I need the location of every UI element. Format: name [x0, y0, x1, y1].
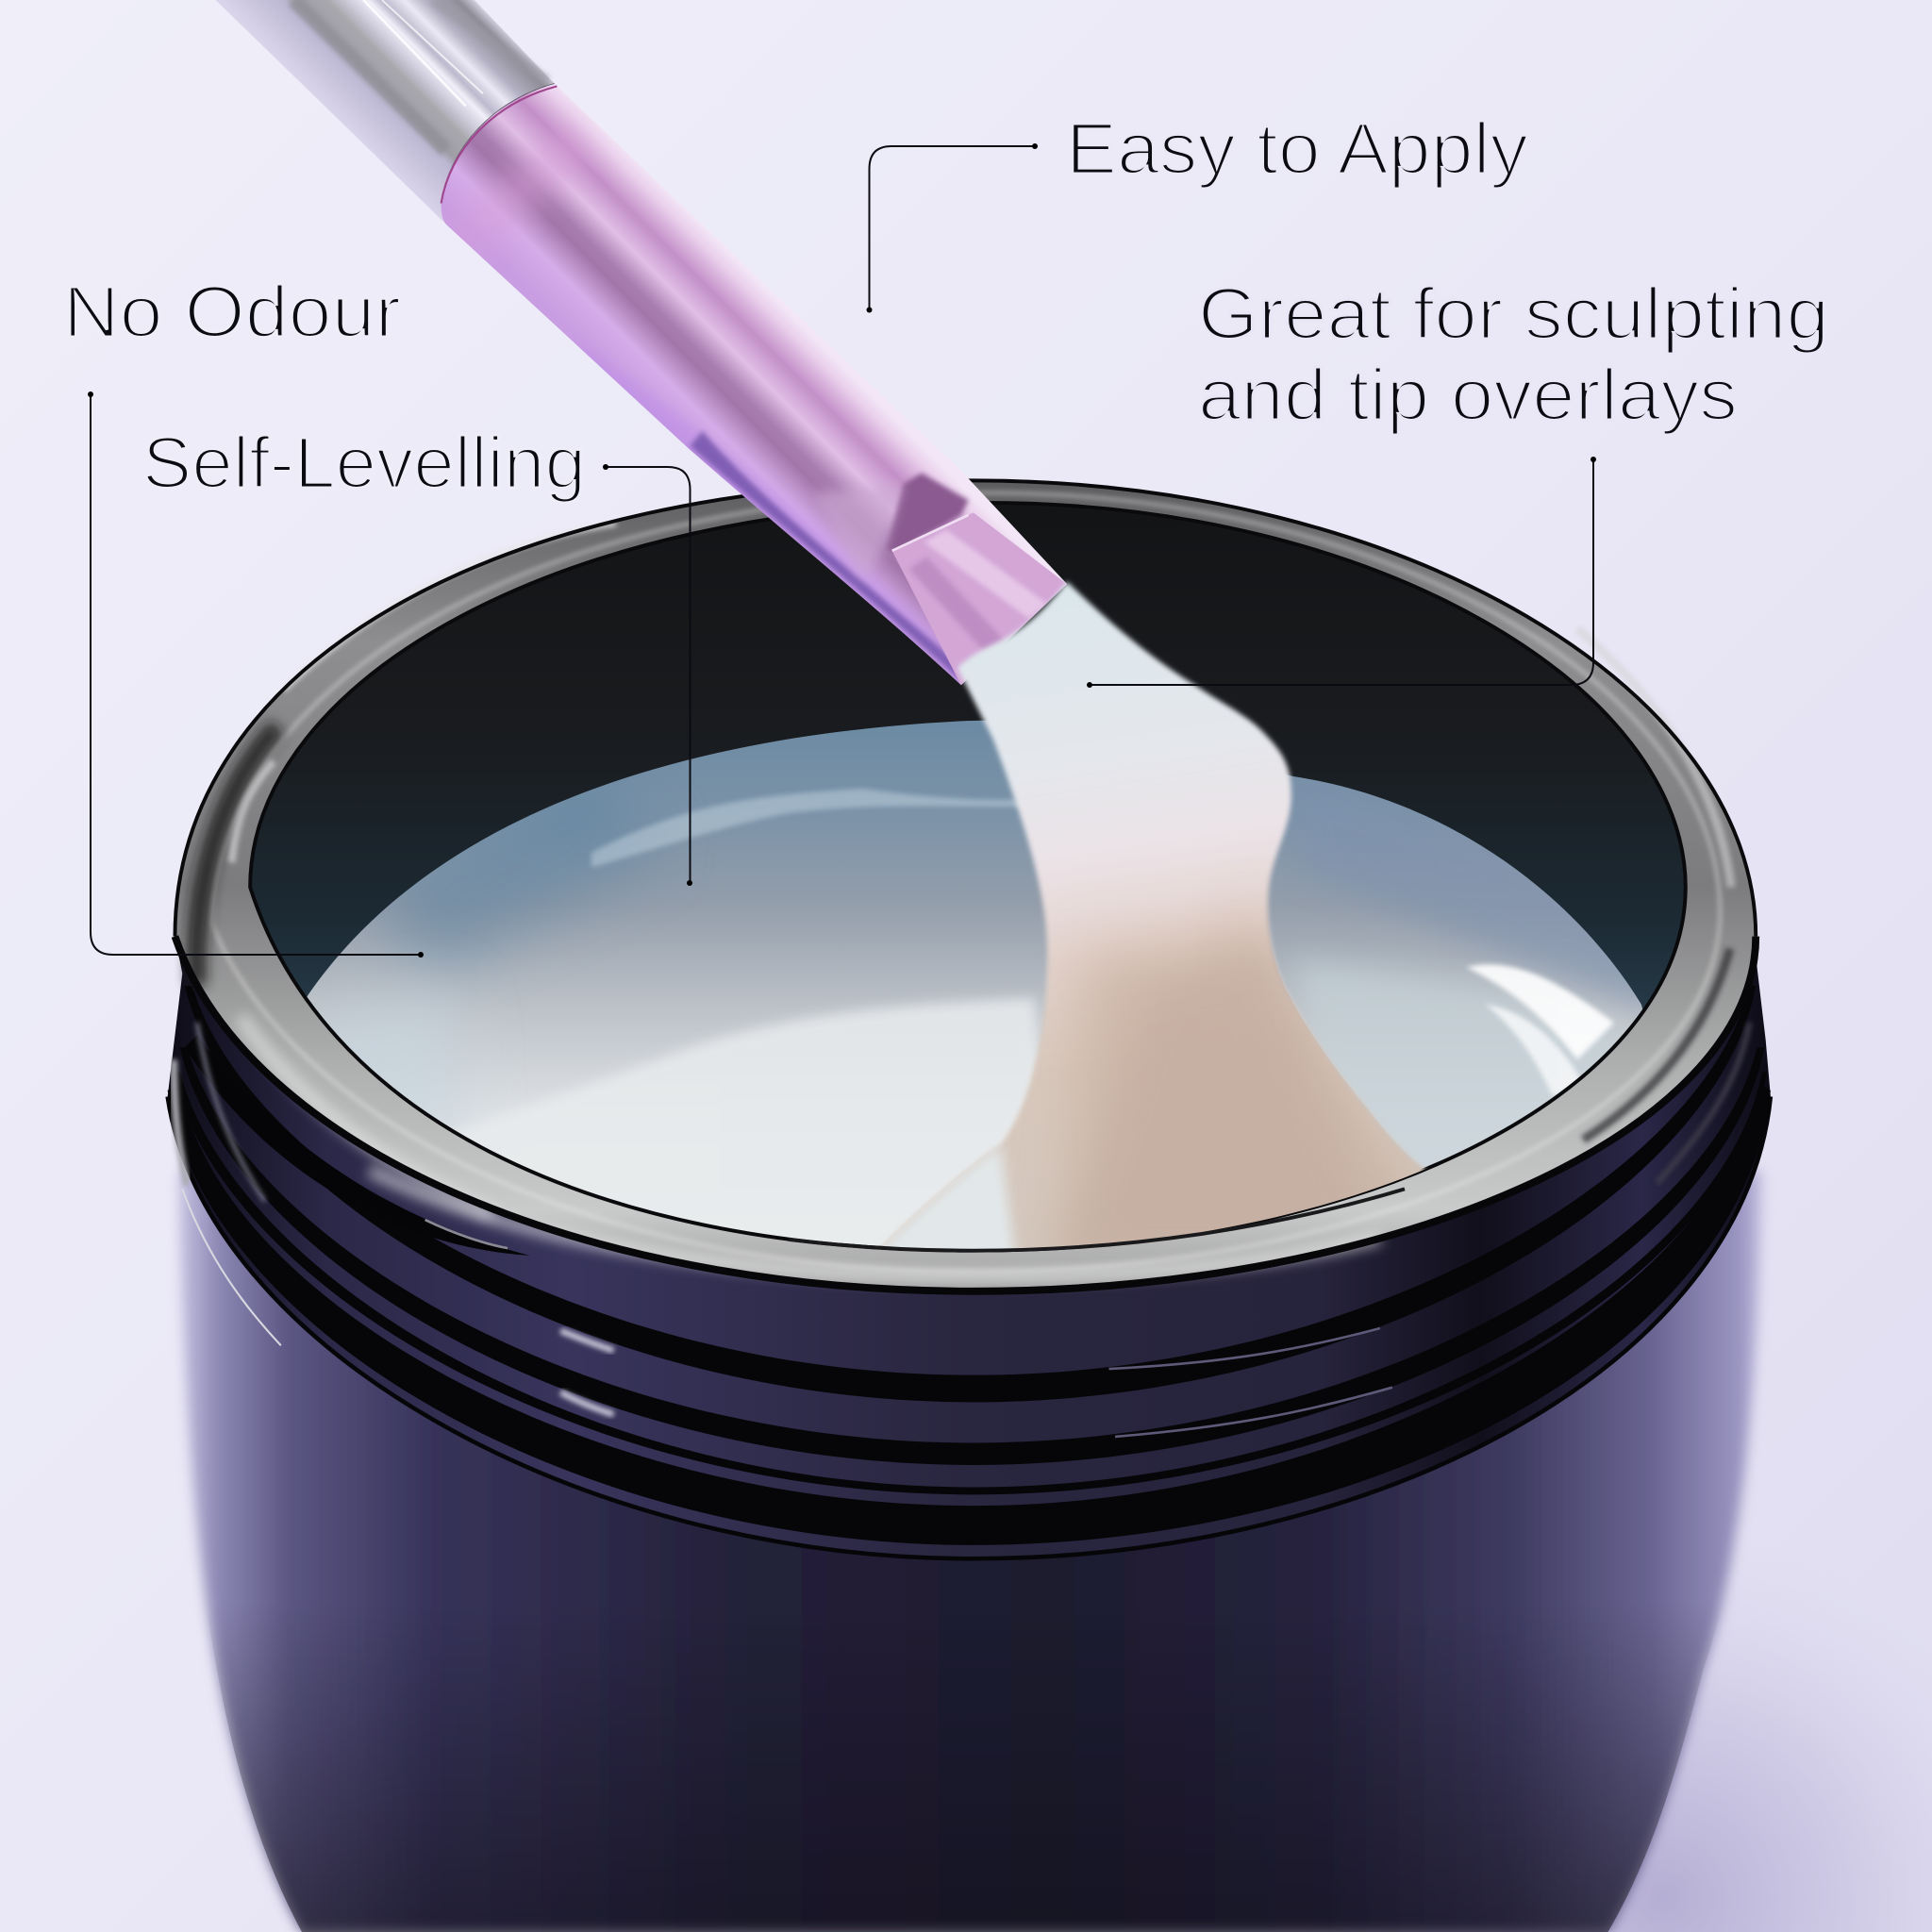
jar body — [178, 1171, 1768, 1932]
callout: No Odour — [63, 272, 424, 958]
jar interior — [250, 503, 1686, 1251]
jar neck with thread grooves — [168, 937, 1771, 1560]
brush ferrule — [441, 84, 1067, 690]
thread gloss — [174, 1023, 1750, 1437]
floor shadow — [1293, 1528, 1932, 1932]
callout: Self-Levelling: Self-Levelling — [142, 423, 586, 504]
thread slit — [185, 1035, 530, 1256]
jar metallic rim — [175, 480, 1756, 1291]
callout: No Odour: No Odour — [63, 272, 401, 353]
gel surface — [307, 721, 1643, 1246]
gel drip on brush tip — [881, 579, 1428, 1249]
ferrule crimp — [885, 474, 969, 552]
callout: Great for sculpting and tip overlays — [1087, 274, 1829, 688]
callout: Easy to Apply — [866, 108, 1529, 313]
brush handle — [216, 0, 1067, 690]
callout: Great for sculpting and tip overlays: Great for sculpting — [1198, 274, 1829, 355]
callout: Easy to Apply: Easy to Apply — [1066, 108, 1529, 190]
front rim edge over drip — [789, 1189, 1405, 1251]
callout: Self-Levelling — [142, 423, 692, 886]
callout: Great for sculpting and tip overlays: and tip overlays — [1198, 355, 1738, 436]
